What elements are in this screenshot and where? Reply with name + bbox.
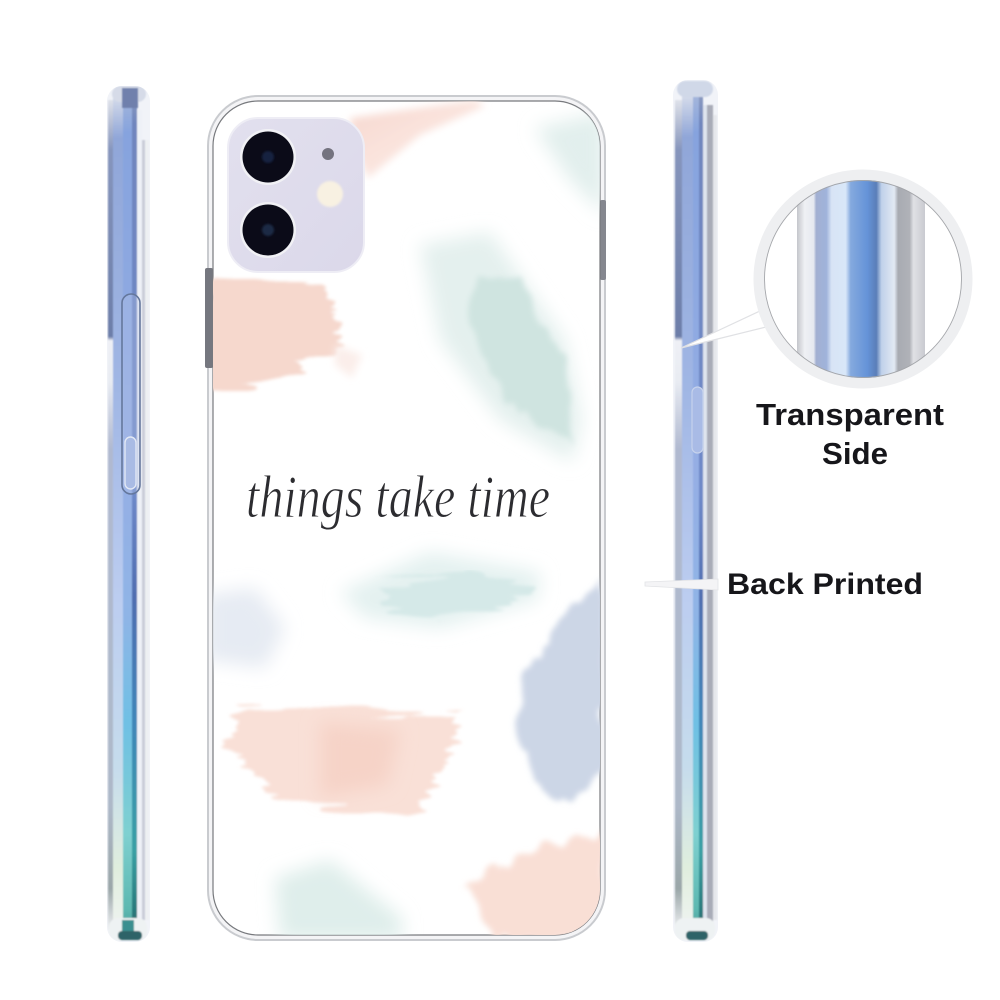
case outer rim xyxy=(208,96,605,940)
icon: upper lens xyxy=(240,129,296,185)
side buttons xyxy=(122,294,140,494)
callout: back printed xyxy=(645,568,923,601)
callout: transparent side magnifier xyxy=(681,170,967,471)
slogan: things take time xyxy=(246,464,550,530)
phone: right side view xyxy=(673,80,718,942)
magnifier pointer xyxy=(681,311,766,348)
icon: flash xyxy=(317,181,343,207)
label: transparent side: Side xyxy=(822,436,888,471)
magnifier circle xyxy=(759,175,967,383)
phone: back view case xyxy=(205,96,606,940)
phone: left side view xyxy=(107,86,150,942)
camera module xyxy=(228,118,364,272)
pointer line xyxy=(645,579,718,590)
right side colour stripes xyxy=(675,81,717,940)
side buttons on case xyxy=(205,268,213,368)
side button xyxy=(692,387,703,453)
icon: lower lens xyxy=(240,202,296,258)
label: transparent side xyxy=(756,397,944,471)
icon: microphone xyxy=(322,148,334,160)
left side colour stripes xyxy=(108,86,149,940)
label: transparent side: Transparent xyxy=(756,397,944,432)
printed brush strokes xyxy=(205,100,605,940)
label: back printed: Back Printed xyxy=(727,568,923,601)
